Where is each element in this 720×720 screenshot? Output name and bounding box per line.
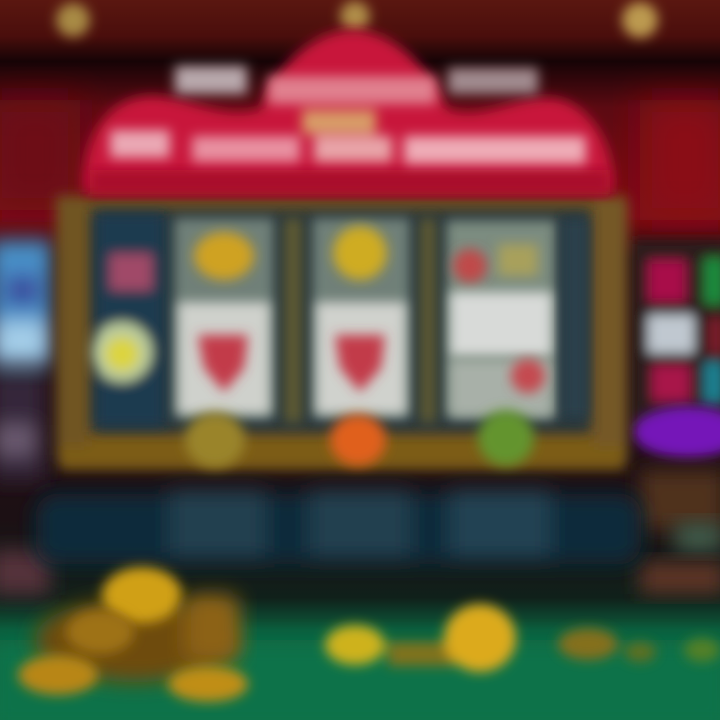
right side machine bbox=[632, 240, 720, 594]
slot machine reels bbox=[92, 210, 590, 432]
ceiling lights bbox=[56, 1, 658, 38]
reel 3 bbox=[312, 218, 410, 418]
reel 2 bbox=[174, 218, 274, 418]
reel 4 bbox=[446, 218, 588, 418]
left side machine bbox=[0, 240, 52, 595]
reel dividers bbox=[284, 218, 436, 423]
gold coin pile bbox=[18, 567, 248, 702]
scattered coins bbox=[325, 604, 720, 672]
reel 1 bbox=[92, 214, 164, 426]
machine cabinet frame bbox=[56, 196, 628, 470]
blurred title lettering bbox=[110, 66, 586, 164]
red canopy with title sign bbox=[84, 30, 613, 194]
lower seats panel bbox=[36, 490, 641, 564]
cabinet buttons bbox=[185, 410, 534, 468]
